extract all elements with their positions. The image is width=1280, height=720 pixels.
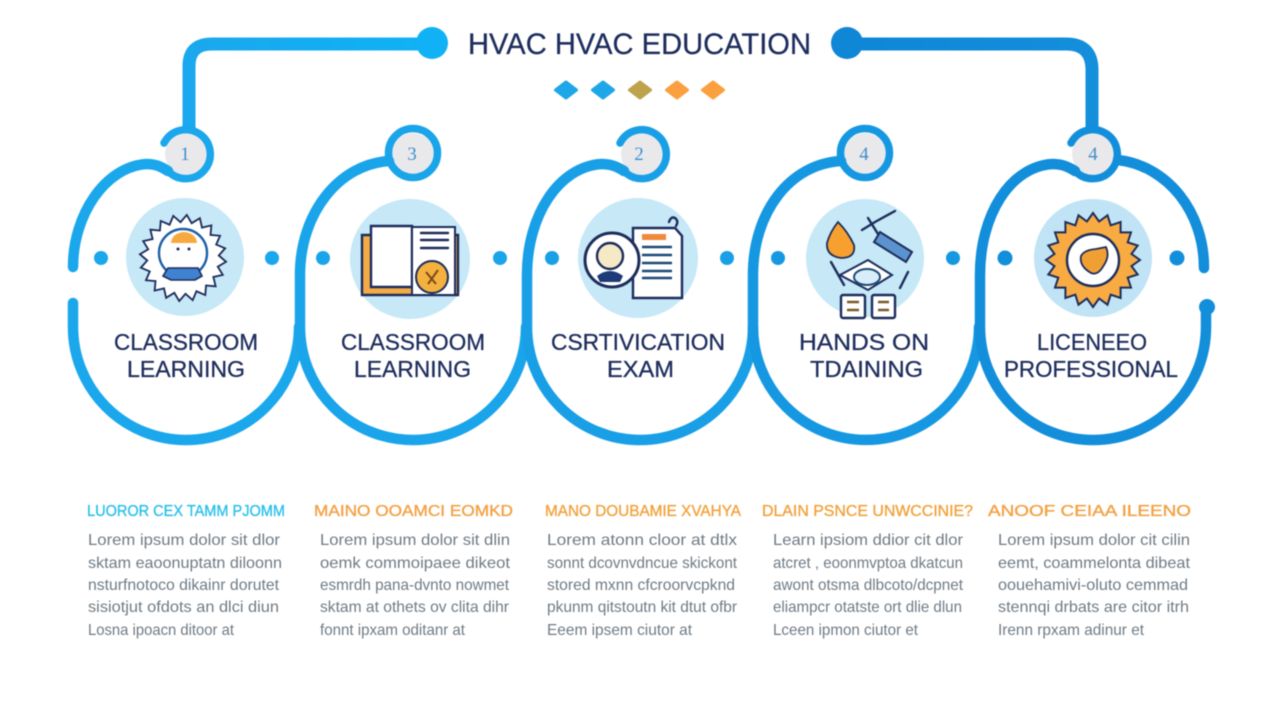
column 4 body <box>773 532 964 639</box>
connector dots 3 <box>545 251 734 265</box>
step 3 label <box>551 329 725 382</box>
text block: column 5 <box>988 503 1191 639</box>
column 1 body: nsturfnotoco dikainr dorutet <box>88 577 280 594</box>
icon: book with seal <box>350 199 470 319</box>
connector: title to step 5 <box>831 27 1092 128</box>
step 4 label <box>799 329 929 382</box>
step 5 label <box>1004 329 1178 382</box>
text block: column 2 <box>314 503 513 639</box>
panel: step 3 certification exam <box>527 130 753 440</box>
column 1 body: sisiotjut ofdots an dlci diun <box>88 599 279 616</box>
column 5 body: Irenn rpxam adinur et <box>998 622 1145 639</box>
column 3 body: Eeem ipsem ciutor at <box>547 622 693 639</box>
column 1 heading: LUOROR CEX TAMM PJOMM <box>87 503 285 520</box>
connector: title to step 1 <box>189 27 448 128</box>
column 3 body: pkunm qitstoutn kit dtut ofbr <box>547 599 738 616</box>
column 2 body: fonnt ipxam oditanr at <box>320 622 466 639</box>
ring 4 <box>753 128 979 440</box>
column 1 body <box>88 532 282 639</box>
step 3 label: EXAM <box>607 356 674 382</box>
column 1 body: Losna ipoacn ditoor at <box>88 622 235 639</box>
step 1 label <box>114 329 258 382</box>
column 2 body: Lorem ipsum dolor sit dlin <box>320 532 510 549</box>
column 5 heading: ANOOF CEIAA ILEENO <box>988 503 1191 520</box>
column 5 body: eemt, coammelonta dibeat <box>998 555 1191 572</box>
column 4 body: Learn ipsiom ddior cit dlor <box>773 532 964 549</box>
step 5 label: LICENEEO <box>1037 329 1147 355</box>
column 2 body <box>320 532 511 639</box>
step 2 label: CLASSROOM <box>341 329 485 355</box>
column 3 body: stored mxnn cfcroorvcpknd <box>547 577 735 594</box>
title: HVAC HVAC EDUCATION <box>468 28 811 61</box>
panel: step 4 hands on training <box>753 128 979 440</box>
step 5 label: PROFESSIONAL <box>1004 356 1178 382</box>
ring end blob <box>1199 299 1215 315</box>
column 3 heading: MANO DOUBAMIE XVAHYA <box>545 503 741 520</box>
column 2 heading: MAINO OOAMCI EOMKD <box>314 503 513 520</box>
step 1 label: LEARNING <box>127 356 245 382</box>
connector dots 4 <box>771 251 960 265</box>
panel: step 2 classroom learning <box>300 128 526 440</box>
step 1 label: CLASSROOM <box>114 329 258 355</box>
ring 1 <box>73 130 299 440</box>
connector dots 2 <box>316 251 507 265</box>
connector dots 1 <box>94 251 279 265</box>
column 4 body: awont otsma dlbcoto/dcpnet <box>773 577 964 594</box>
panel: step 5 licensed professional <box>980 130 1215 440</box>
column 4 body: atcret , eoonmvptoa dkatcun <box>773 555 963 572</box>
column 3 body: Lorem atonn cloor at dtlx <box>547 532 737 549</box>
ring 5 <box>980 130 1206 440</box>
icon: exam document <box>578 198 698 318</box>
column 5 body <box>998 532 1191 639</box>
column 4 body: eliampcr otatste ort dlie dlun <box>773 599 962 616</box>
step 4 label: HANDS ON <box>799 329 929 355</box>
column 4 heading: DLAIN PSNCE UNWCCINIE? <box>762 503 973 520</box>
column 2 body: sktam at othets ov clita dihr <box>320 599 510 616</box>
text block: column 3 <box>545 503 741 639</box>
step 3 label: CSRTIVICATION <box>551 329 725 355</box>
icon: student with laptop <box>126 198 244 316</box>
number badge 3: 2 <box>634 144 644 165</box>
text block: column 1 <box>87 503 285 639</box>
text block: column 4 <box>762 503 973 639</box>
ring 3 <box>527 130 753 440</box>
column 5 body: oouehamivi-oluto cemmad <box>998 577 1188 594</box>
icon: licence badge <box>1034 199 1152 317</box>
connector dots 5 <box>998 250 1184 266</box>
icon: tools, cap and blocks <box>806 199 924 318</box>
column 5 body: stennqi drbats are citor itrh <box>998 599 1189 616</box>
column 1 body: sktam eaoonuptatn diloonn <box>88 555 282 572</box>
decorative title dots <box>556 82 724 98</box>
column 4 body: Lceen ipmon ciutor et <box>773 622 919 639</box>
number badge 1: 1 <box>180 144 190 165</box>
number badge 5: 4 <box>1088 144 1098 165</box>
panel: step 1 classroom learning <box>73 130 299 440</box>
ring 2 <box>300 128 526 440</box>
step 4 label: TDAINING <box>810 356 923 382</box>
column 2 body: esmrdh pana-dvnto nowmet <box>320 577 510 594</box>
column 5 body: Lorem ipsum dolor cit cilin <box>998 532 1190 549</box>
number badge 4: 4 <box>859 144 869 165</box>
column 2 body: oemk commoipaee dikeot <box>320 555 511 572</box>
number badge 2: 3 <box>407 144 417 165</box>
column 3 body: sonnt dcovnvdncue skickont <box>547 555 738 572</box>
step 2 label: LEARNING <box>354 356 471 382</box>
column 3 body <box>547 532 738 639</box>
step 2 label <box>341 329 485 382</box>
column 1 body: Lorem ipsum dolor sit dlor <box>88 532 281 549</box>
